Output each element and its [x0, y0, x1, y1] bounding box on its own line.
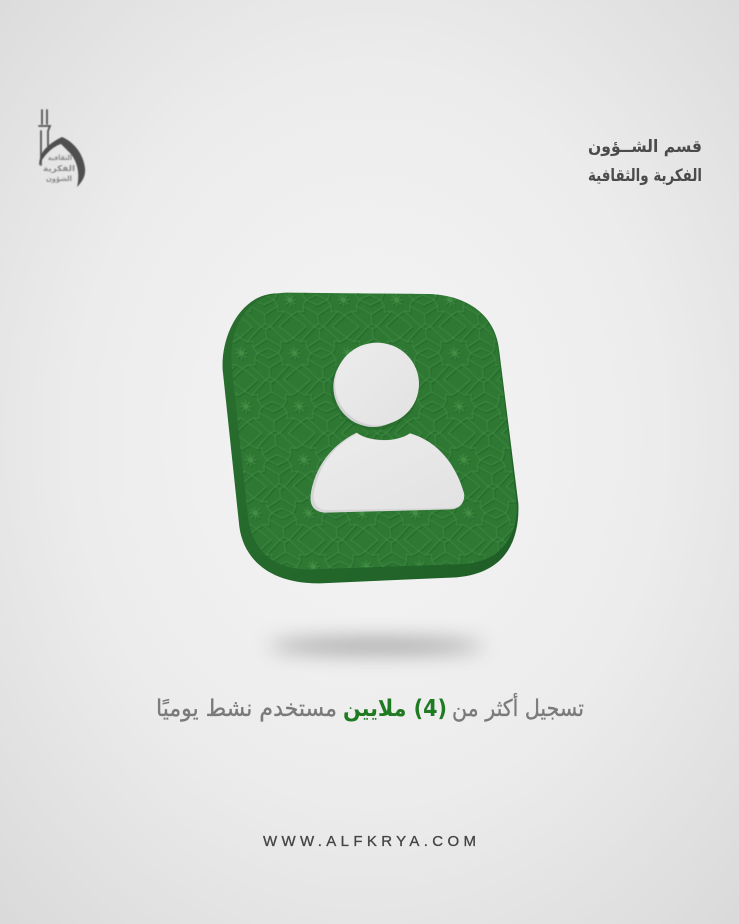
tile side wall: [223, 293, 518, 583]
logo: minaret and dome calligraphy: [39, 110, 85, 187]
floor shadow: [268, 639, 484, 653]
headline: [156, 693, 584, 722]
tile top face: [231, 293, 517, 569]
calligraphy: الثقافية: [48, 154, 72, 162]
website url: WWW.ALFKRYA.COM: [263, 833, 476, 850]
shadow under head: [331, 347, 419, 430]
dome: [39, 137, 85, 187]
department line 1: قسم الشــؤون: [588, 137, 702, 157]
department line 2: الفكرية والثقافية: [588, 166, 702, 186]
user silhouette: [310, 343, 464, 513]
minaret: [39, 110, 50, 165]
shoulders top: [314, 433, 464, 510]
headline highlighted part: (4) ملايين: [343, 696, 447, 722]
calligraphy: [43, 154, 75, 183]
islamic geometric pattern: [223, 287, 523, 577]
head top: [335, 343, 419, 425]
calligraphy: الشؤون: [46, 175, 72, 183]
department title: [588, 137, 702, 186]
app icon: green rounded tile with user silhouette: [223, 287, 523, 583]
headline part 1: تسجيل أكثر من: [452, 693, 584, 722]
head side: [333, 346, 413, 427]
headline part 2: مستخدم نشط يوميًا: [156, 696, 337, 722]
shoulders side: [310, 433, 464, 513]
calligraphy: الفكرية: [43, 164, 75, 173]
